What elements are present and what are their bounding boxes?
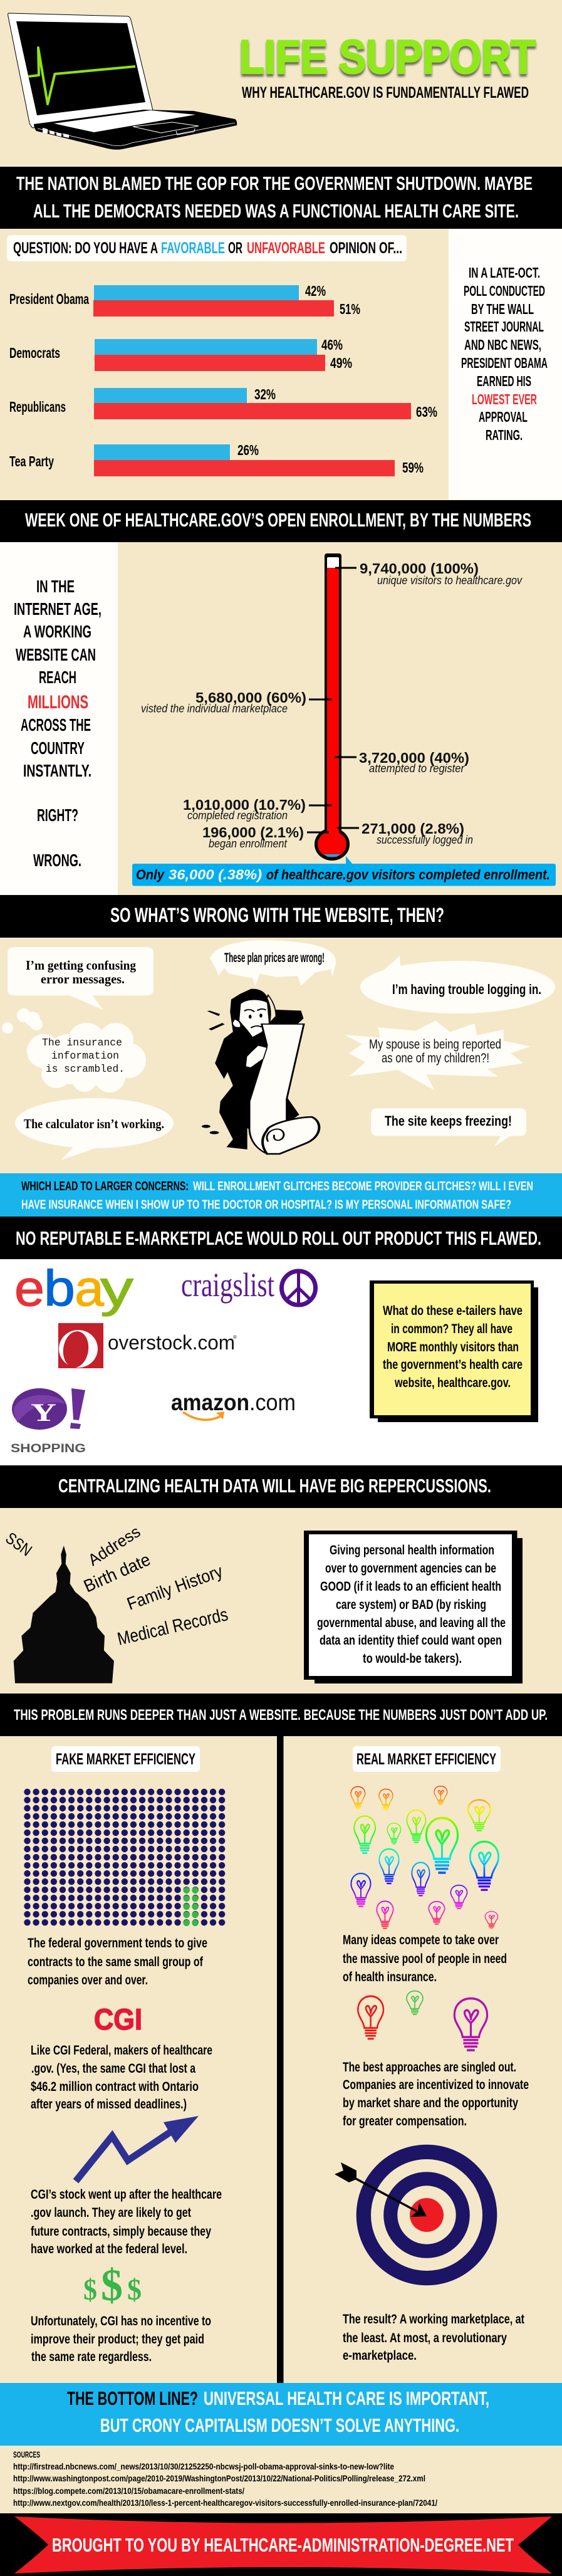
bubble: calculator	[15, 1098, 174, 1160]
panel: internet age text: ACROSS THE	[21, 715, 91, 735]
label: Birth date: Birth date	[81, 1549, 154, 1596]
text: many ideas: of health insurance.	[343, 1970, 437, 1984]
note: personal health information	[304, 1531, 523, 1683]
heading: real market efficiency	[353, 1746, 501, 1772]
footer banner	[0, 2513, 562, 2576]
bubble: plan prices icy: These plan prices are wrong!	[224, 951, 325, 965]
question box	[7, 235, 407, 261]
text: best approaches: for greater compensation.	[343, 2114, 467, 2128]
bubble: spouse reported as child	[345, 1021, 531, 1090]
tick: 196,000	[202, 824, 329, 850]
row: Democrats	[9, 337, 352, 371]
text: many ideas: the massive pool of people in need	[343, 1952, 507, 1966]
logo: amazon: .com	[249, 1390, 296, 1415]
text: CGI stock: .gov launch. They are likely to get	[31, 2206, 191, 2220]
bar chart: favorability	[9, 283, 437, 476]
logo: ebay: b	[44, 1260, 75, 1317]
panel: poll	[0, 229, 562, 500]
question box: OR	[228, 239, 242, 257]
note: what do these e-tailers have in common: the government’s health care	[383, 1358, 523, 1372]
text: no incentive: improve their product; they get paid	[31, 2332, 204, 2347]
row: President Obama: 42%	[305, 283, 326, 299]
label: Address: Address	[85, 1522, 143, 1569]
panel: sources: https://blog.compete.com/2013/10/15/obamacare-enrollment-stats/	[13, 2486, 244, 2496]
note: personal health information: GOOD (if it leads to an efficient health	[320, 1579, 501, 1594]
bubble: site keeps freezing	[371, 1108, 526, 1147]
panel: larger concerns band	[0, 1173, 562, 1217]
callout: only 36,000: 36,000 (.38%)	[169, 867, 262, 882]
tick: 9,740,000: 9,740,000 (100%)	[360, 560, 479, 577]
text: same small group	[28, 1936, 207, 1987]
bubble: site keeps freezing: The site keeps freezing!	[385, 1113, 512, 1129]
note: what do these e-tailers have in common: in common? They all have	[391, 1322, 513, 1336]
row: Tea Party: 26%	[237, 442, 259, 458]
panel: internet age text: A WORKING	[23, 622, 91, 641]
logo: CGI: CGI	[94, 2003, 142, 2036]
text: the result	[343, 2312, 524, 2363]
panel: sources: http://firstread.nbcnews.com/_news/2013/10/30/21252250-nbcwsj-poll-obama-approval-sinks-to-new-low?lite	[13, 2461, 394, 2471]
bubble: scrambled information cloud: information	[51, 1050, 119, 1062]
row: President Obama: President Obama	[9, 291, 89, 307]
row: Tea Party	[9, 442, 424, 476]
panel: internet age text: MILLIONS	[28, 692, 88, 713]
heading band: centralizing health data	[0, 1465, 562, 1508]
panel: larger concerns band: WHICH LEAD TO LARGER CONCERNS:	[21, 1180, 189, 1193]
chart: dot grid of contractors	[28, 1792, 222, 1924]
callout: only 36,000	[132, 856, 556, 886]
heading band: week one	[0, 500, 562, 542]
note: personal health information: care system) or BAD (by risking	[336, 1598, 486, 1612]
note: what do these e-tailers have in common	[370, 1280, 538, 1422]
tick: 196,000: 196,000 (2.1%)	[202, 824, 304, 840]
text: CGI Federal	[31, 2043, 212, 2112]
row: Republicans: 32%	[254, 386, 276, 402]
note: personal health information: governmental abuse, and leaving all the	[317, 1616, 506, 1630]
logo: yahoo shopping: Y	[31, 1398, 56, 1427]
logo: ebay: e	[14, 1260, 44, 1317]
text: no incentive: Unfortunately, CGI has no incentive to	[31, 2314, 211, 2328]
logo: yahoo shopping	[11, 1388, 86, 1455]
tick: 3,720,000: attempted to register	[369, 762, 465, 775]
text: same small group: companies over and over.	[28, 1973, 148, 1987]
callout: lowest approval: RATING.	[486, 427, 523, 443]
row: Tea Party: Tea Party	[9, 453, 54, 469]
logo: yahoo shopping: SHOPPING	[11, 1442, 86, 1455]
note: personal health information: to would-be takers).	[363, 1652, 462, 1666]
bubble: confusing error messages: I’m getting confusing	[26, 958, 136, 973]
callout: only 36,000: Only	[136, 867, 165, 882]
row: Republicans: Republicans	[9, 399, 66, 415]
panel: fake market efficiency	[28, 1746, 222, 2364]
question box: UNFAVORABLE	[247, 239, 325, 257]
panel: the bottom line: THE BOTTOM LINE?	[67, 2387, 198, 2409]
text: CGI Federal: after years of missed deadlines.)	[31, 2097, 187, 2112]
text: many ideas: Many ideas compete to take over	[343, 1933, 499, 1947]
text: best approaches	[343, 2060, 529, 2128]
tick: 271,000	[337, 820, 473, 846]
row: President Obama: 51%	[340, 301, 360, 317]
icon: dollar signs: $	[127, 2273, 142, 2306]
panel: internet age text: WEBSITE CAN	[16, 645, 96, 664]
panel: real market efficiency	[335, 1746, 539, 2363]
panel: sources: SOURCES	[13, 2449, 40, 2459]
tick: 9,740,000	[335, 560, 523, 587]
logo: amazon	[171, 1390, 296, 1420]
label: SSN: SSN	[2, 1529, 36, 1560]
heading band: deeper problem	[0, 1694, 562, 1736]
icon: dollar signs	[83, 2260, 142, 2310]
panel: internet age text: IN THE	[36, 577, 75, 596]
tick: 1,010,000: completed registration	[187, 809, 288, 822]
note: what do these e-tailers have in common: What do these e-tailers have	[383, 1304, 523, 1318]
panel: internet age text: REACH	[39, 668, 76, 687]
header panel	[8, 13, 536, 150]
heading: fake market efficiency	[51, 1746, 200, 1772]
icon: dollar signs: $	[83, 2273, 97, 2306]
bubble: confusing error messages	[8, 947, 154, 1010]
logo: amazon: amazon	[171, 1390, 249, 1415]
panel: internet age text: INTERNET AGE,	[14, 599, 101, 619]
panel: sources: http://www.nextgov.com/health/2013/10/less-1-percent-healthcaregov-visitors-successfully-enrolled-insurance-plan/72041/	[13, 2498, 437, 2508]
bubble: scrambled information cloud	[2, 1008, 146, 1092]
icon: worried man holding long scroll	[202, 989, 319, 1154]
panel: sources: http://www.washingtonpost.com/page/2010-2019/WashingtonPost/2013/10/22/National-Politics/Polling/release_272.xml	[13, 2473, 425, 2483]
tick: 5,680,000: visted the individual marketplace	[141, 702, 288, 715]
note: personal health information: Giving personal health information	[330, 1543, 494, 1558]
text: CGI stock: have worked at the federal level.	[31, 2242, 187, 2256]
callout: lowest approval	[449, 229, 562, 500]
text: no incentive: the same rate regardless.	[31, 2350, 152, 2364]
icon: capitol dome	[14, 1546, 114, 1683]
label: Medical Records: Medical Records	[115, 1605, 230, 1650]
row: Republicans	[9, 386, 437, 420]
text: CGI stock	[31, 2187, 222, 2256]
logo: overstock	[58, 1323, 237, 1369]
heading band: what's wrong	[0, 895, 562, 938]
bubble: scrambled information cloud: The insurance	[42, 1037, 122, 1049]
bubble: plan prices icy	[210, 940, 336, 986]
row: Republicans: 63%	[416, 404, 437, 420]
thermometer	[315, 553, 350, 861]
icon: three winning bulbs	[358, 1991, 487, 2050]
text: the result: the least. At most, a revolutionary	[343, 2331, 507, 2345]
note: personal health information: over to government agencies can be	[325, 1561, 496, 1576]
tick: 271,000: successfully logged in	[377, 834, 473, 846]
chart: thermometer of enrollment funnel	[132, 553, 556, 886]
tick: 3,720,000: 3,720,000 (40%)	[359, 750, 469, 766]
bubble: calculator: The calculator isn’t working.	[24, 1116, 164, 1131]
logo: craigslist: craigslist	[181, 1266, 274, 1304]
icon: dollar signs: $	[101, 2260, 123, 2310]
bubble: scrambled information cloud: is scrambled.	[46, 1063, 125, 1075]
panel: internet age text	[0, 542, 118, 895]
panel: internet age text: RIGHT?	[37, 805, 78, 825]
bubble: spouse reported as child: My spouse is being reported	[369, 1037, 501, 1052]
bubble: spouse reported as child: as one of my children?!	[382, 1051, 489, 1065]
panel: internet age text: COUNTRY	[31, 738, 85, 758]
text: the result: e-marketplace.	[343, 2348, 417, 2363]
text: no incentive	[31, 2314, 211, 2364]
icon: rising stock arrow	[76, 2116, 199, 2181]
label: Family History: Family History	[124, 1561, 225, 1614]
logo: ebay: y	[100, 1260, 134, 1317]
callout: lowest approval: APPROVAL	[479, 409, 528, 425]
panel: health data	[2, 1522, 523, 1683]
tick: 1,010,000: 1,010,000 (10.7%)	[183, 797, 306, 813]
row: Tea Party: 59%	[402, 459, 424, 476]
panel: sources	[13, 2449, 437, 2508]
question box: QUESTION: DO YOU HAVE A	[13, 239, 158, 257]
heading band: no reputable e-marketplace	[0, 1217, 562, 1259]
question box: OPINION OF...	[330, 239, 402, 257]
icon: laptop with heartbeat	[8, 13, 237, 150]
heading: real market efficiency: REAL MARKET EFFICIENCY	[356, 1751, 496, 1768]
tick: 1,010,000	[183, 797, 331, 822]
panel: internet age text: WRONG.	[33, 851, 81, 870]
icon: rainbow light bulbs	[350, 1786, 499, 1929]
heading: fake market efficiency: FAKE MARKET EFFICIENCY	[56, 1751, 195, 1768]
panel: e-tailers	[0, 1259, 562, 1465]
text: many ideas	[343, 1933, 507, 1984]
bubble: confusing error messages: error messages.	[41, 971, 125, 987]
note: what do these e-tailers have in common: MORE monthly visitors than	[387, 1340, 519, 1354]
text: CGI stock: future contracts, simply because they	[31, 2224, 211, 2239]
bubble: trouble logging in	[360, 956, 555, 1013]
note: personal health information: data an identity thief could want open	[320, 1633, 502, 1648]
text: CGI Federal: .gov. (Yes, the same CGI that lost a	[31, 2061, 195, 2076]
icon: target and arrow	[335, 2145, 497, 2285]
logo: overstock: overstock.com	[108, 1331, 235, 1354]
panel: internet age text: INSTANTLY.	[23, 761, 91, 780]
tick: 9,740,000: unique visitors to healthcare.gov	[377, 574, 523, 587]
text: same small group: The federal government tends to give	[28, 1936, 207, 1950]
panel: the bottom line	[0, 2383, 562, 2446]
logo: overstock: ®	[233, 1334, 237, 1340]
logo: ebay	[14, 1260, 134, 1317]
tick: 196,000: began enrollment	[209, 837, 288, 850]
note: what do these e-tailers have in common: website, healthcare.gov.	[394, 1376, 511, 1390]
row: Democrats: Democrats	[9, 345, 60, 361]
panel: website complaints	[2, 940, 555, 1160]
logo: ebay: a	[75, 1260, 105, 1317]
row: President Obama	[9, 283, 360, 317]
text: same small group: contracts to the same small group of	[28, 1955, 204, 1969]
tick: 5,680,000: 5,680,000 (60%)	[195, 689, 306, 706]
tick: 271,000: 271,000 (2.8%)	[362, 820, 464, 837]
row: Democrats: 49%	[330, 355, 352, 371]
tick: 3,720,000	[335, 750, 469, 775]
row: Democrats: 46%	[321, 337, 343, 353]
text: CGI stock: CGI’s stock went up after the healthcare	[31, 2187, 222, 2202]
question box: FAVORABLE	[161, 239, 225, 257]
tick: 5,680,000	[141, 689, 331, 715]
text: CGI Federal: $46.2 million contract with Ontario	[31, 2080, 199, 2094]
heading band: shutdown	[0, 167, 562, 229]
text: CGI Federal: Like CGI Federal, makers of healthcare	[31, 2043, 212, 2058]
